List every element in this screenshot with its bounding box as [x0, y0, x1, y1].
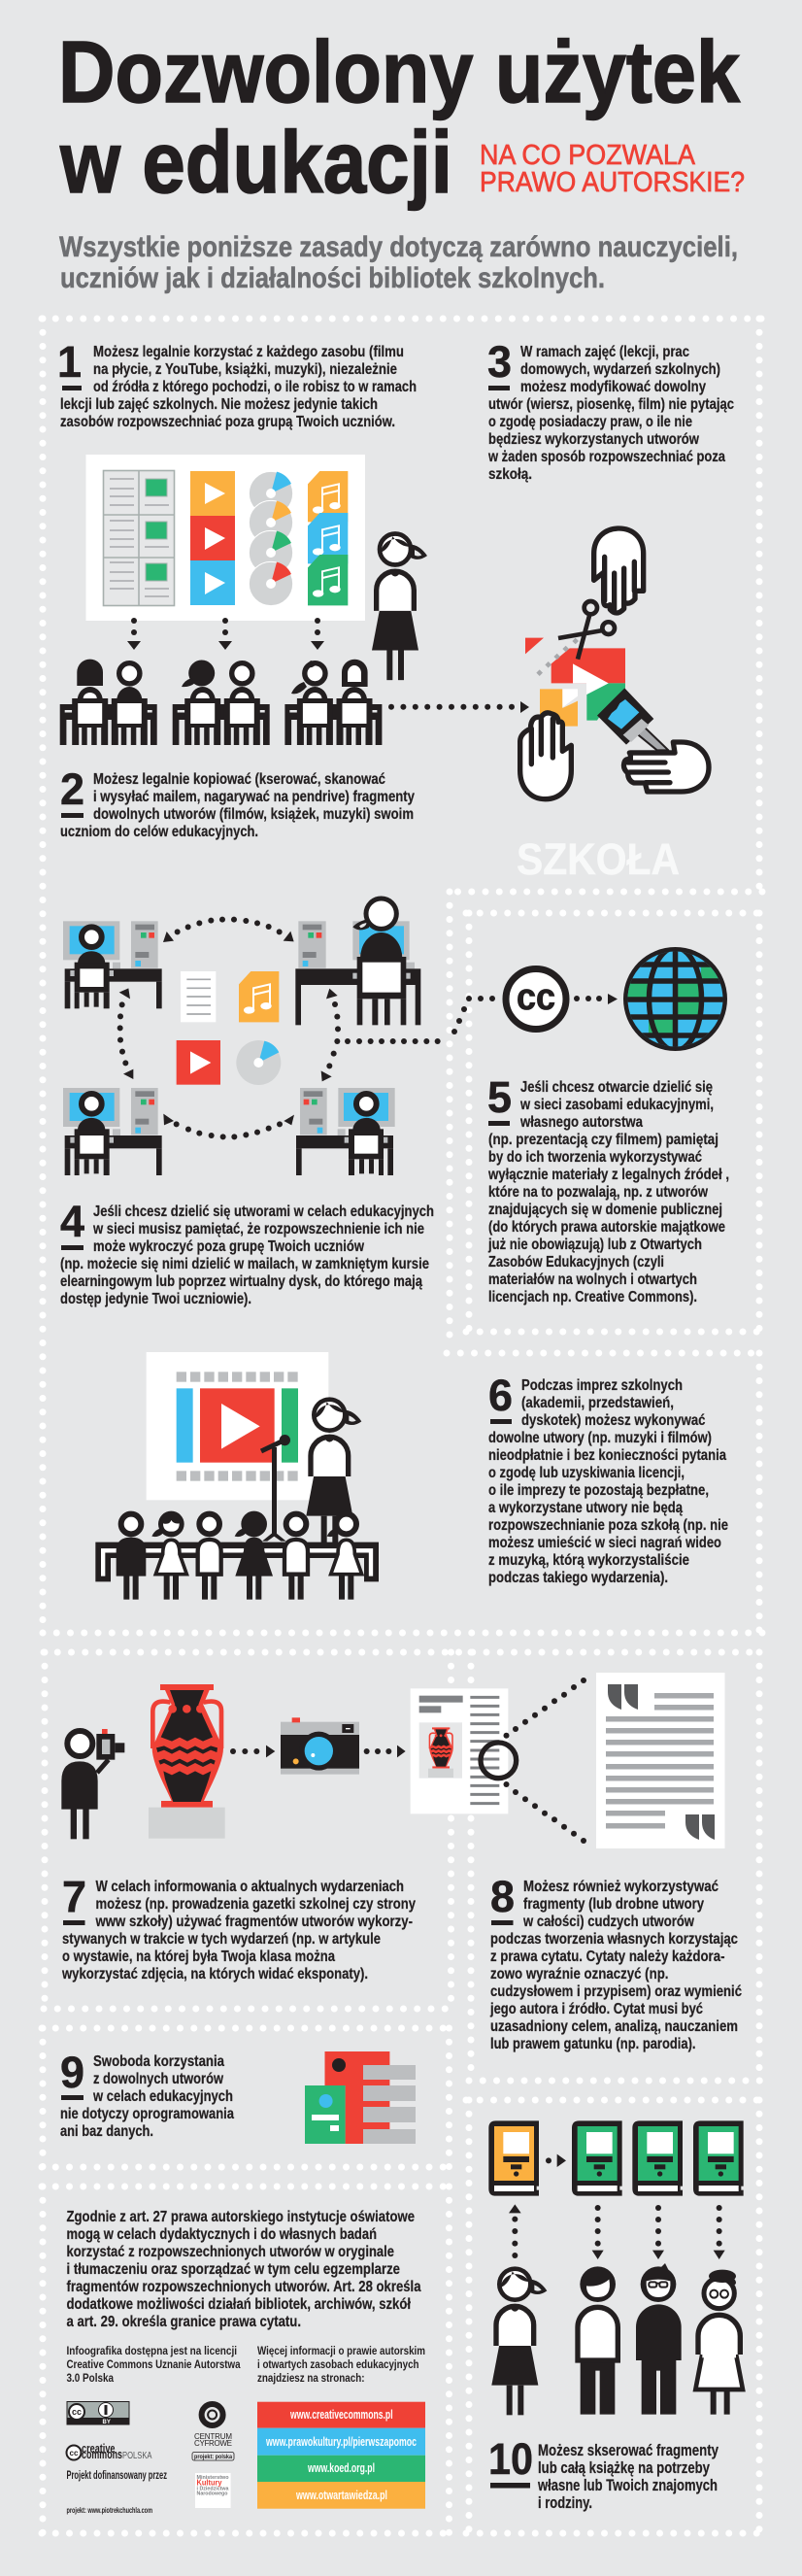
rule 8 text: uzasadniony celem, analizą, nauczaniem [490, 2018, 738, 2035]
rule 5 text: znajdujących się w domenie publicznej [488, 1202, 722, 1218]
rule 7 text: o wystawie, na której była Twoja klasa można [62, 1949, 335, 1965]
legal text: i tłumaczeniu oraz sporządzać w tym celu egzemplarze [66, 2261, 400, 2278]
rule 9 text: Swoboda korzystania [93, 2053, 224, 2070]
legal text: fragmentów rozpowszechnionych utworów. Art. 28 określa [66, 2279, 421, 2295]
rule 5 text: które na to pozwalają, np. z utworów [488, 1184, 709, 1201]
camera [281, 1717, 359, 1775]
scene: photographer, vase, camera, article [61, 1684, 517, 1839]
rule 4 text: Jeśli chcesz dzielić się utworami w celach edukacyjnych [93, 1203, 434, 1220]
person: woman with bun [695, 2270, 743, 2415]
rule 8 text: cudzysłowem i przypisem) oraz wymienić [490, 1983, 742, 2000]
kids [117, 1511, 362, 1600]
arrow [230, 1746, 275, 1757]
film tiles [190, 471, 235, 605]
arrow [364, 1746, 406, 1757]
link list: www.creativecommons.pl [289, 2407, 393, 2422]
rule 8 text: w całości) cudzych utworów [522, 1914, 695, 1930]
rule 6 text [488, 1371, 728, 1586]
icon: creative commons: cc [517, 977, 555, 1018]
computer user bottom right [296, 1088, 395, 1175]
rule 4 text: (np. możecie się nimi dzielić w mailach, w zamkniętym kursie [60, 1256, 429, 1272]
microphone [261, 1435, 290, 1542]
rule 1 text: Możesz legalnie korzystać z każdego zasobu (filmu [93, 344, 404, 360]
photographer [61, 1729, 124, 1839]
subtitle red [480, 140, 745, 198]
teacher [372, 534, 427, 680]
rule 4 text: może wykroczyć poza grupę Twoich uczniów [93, 1238, 365, 1255]
rule 6 text: o ile imprezy te pozostają bezpłatne, [488, 1482, 709, 1499]
cc by badge [67, 2401, 129, 2425]
books [488, 2120, 744, 2196]
title: Dozwolony użytek [58, 24, 741, 121]
title: w edukacji [59, 115, 452, 212]
rule 3 text: szkołą. [488, 466, 532, 483]
quote page [596, 1673, 724, 1848]
license note [66, 2344, 241, 2385]
link list: www.prawokultury.pl/pierwszapomoc [265, 2434, 417, 2449]
article page [411, 1688, 508, 1813]
book pages [103, 470, 175, 606]
centrum cyfrowe logo [192, 2404, 234, 2460]
more info note [257, 2344, 425, 2385]
rule 3 text: będziesz wykorzystanych utworów [488, 431, 700, 448]
rule 3 text: utwór (wiersz, piosenkę, film) nie pytając [488, 396, 734, 413]
link list: www.koed.org.pl [307, 2460, 375, 2475]
ministry logo: Kultury [196, 2479, 222, 2487]
link list: www.otwartawiedza.pl [295, 2488, 387, 2502]
ministry logo: Ministerstwo [196, 2475, 229, 2481]
rule 8 text: lub prawem gatunku (np. parodia). [490, 2036, 695, 2052]
rule 5 text: (do których prawa autorskie majątkowe [488, 1219, 725, 1236]
designer credit: projekt: www.piotrekchuchla.com [66, 2506, 152, 2515]
rule 6 text: (akademii, przedstawień, [521, 1395, 674, 1411]
rule 1 text: 1 [57, 337, 82, 387]
rule 2 text: i wysyłać mailem, nagarywać na pendrive) fragmenty [93, 789, 415, 805]
table [95, 1542, 379, 1581]
rule 8 text [489, 1872, 742, 2052]
video file [177, 1040, 220, 1085]
music file [239, 971, 279, 1022]
brush [597, 688, 668, 750]
rule 6 text: nieodpłatnie i bez konieczności pytania [488, 1447, 726, 1464]
intro heading: uczniów jak i działalności bibliotek szkolnych. [60, 262, 605, 294]
rule 3 text: możesz modyfikować dowolny [520, 379, 706, 395]
rule 4 text: elearningowym lub poprzez wirtualny dysk, do którego mają [60, 1273, 422, 1290]
rule 8 text: zowo wyraźnie oznaczyć (np. [490, 1966, 668, 1983]
ministry logo: i Dziedzictwa [196, 2487, 229, 2492]
license note: 3.0 Polska [66, 2371, 114, 2385]
rule 1 text: zasobów rozpowszechniać poza grupą Twoich uczniów. [60, 414, 395, 430]
rule 5 text: Jeśli chcesz otwarcie dzielić się [520, 1079, 713, 1096]
rule 8 text: fragmenty (lub drobne utwory [523, 1896, 704, 1913]
creative commons polska logo [66, 2441, 152, 2461]
legal text: Zgodnie z art. 27 prawa autorskiego instytucje oświatowe [66, 2209, 415, 2225]
icon: globe [621, 947, 730, 1052]
rule 9 text [60, 2048, 234, 2140]
rule 10 text: Możesz skserować fragmenty [538, 2442, 719, 2459]
rule 6 text: o zgodę lub uzyskiwania licencji, [488, 1465, 685, 1481]
rule 7 text [61, 1872, 416, 1983]
students [60, 660, 382, 745]
centrum cyfrowe logo: projekt: polska [194, 2455, 233, 2460]
rule 1 text [57, 337, 417, 430]
rule 6 text: podczas takiego wydarzenia). [488, 1570, 668, 1586]
rule 6 text: możesz umieścić w sieci nagrań wideo [488, 1535, 721, 1551]
screen [147, 1352, 328, 1500]
ministry logo: Narodowego [196, 2491, 227, 2496]
rule 2 text: dowolnych utworów (filmów, książek, muzyki) swoim [93, 806, 414, 823]
legal text: mogą w celach dydaktycznych i do własnych badań [66, 2226, 377, 2243]
license note: Infoografika dostępna jest na licencji [66, 2344, 237, 2357]
sponsor note: Projekt dofinansowany przez [66, 2468, 167, 2482]
arrows down [127, 618, 324, 650]
discs [249, 471, 293, 606]
top hand [594, 528, 644, 613]
rule 1 text: lekcji lub zajęć szkolnych. Nie możesz jedynie takich [60, 396, 378, 413]
rule 4 text: 4 [60, 1197, 84, 1246]
cc by badge: BY [103, 2420, 111, 2425]
rule 10 text: 10 [488, 2434, 533, 2484]
more info note: i otwartych zasobach edukacyjnych [257, 2357, 419, 2371]
rule 5 text [487, 1072, 729, 1305]
arrows [509, 2154, 725, 2259]
person: girl [491, 2269, 547, 2415]
rule 3 text: 3 [487, 337, 512, 387]
creative commons polska logo: commons [82, 2447, 122, 2461]
rule 10 text [488, 2434, 719, 2512]
rule 5 text: własnego autorstwa [519, 1114, 643, 1131]
person: boy with glasses [636, 2263, 682, 2415]
rule 3 text [487, 337, 734, 483]
rule 6 text: rozpowszechnianie poza szkołą (np. nie [488, 1517, 728, 1534]
computer user bottom left [63, 1088, 162, 1175]
cc by badge: cc [72, 2407, 82, 2417]
subtitle red: PRAWO AUTORSKIE? [480, 167, 745, 198]
rule 7 text: stywanych w trakcie w tych wydarzeń (np. w artykule [62, 1931, 381, 1948]
rule 7 text: wykorzystać zdjęcia, na których widać eksponaty). [61, 1966, 368, 1983]
scene: school event [95, 1352, 379, 1600]
rule 1 text: od źródła z którego pochodzi, o ile robisz to w ramach [93, 379, 417, 395]
rule 7 text: 7 [62, 1872, 86, 1921]
rule 5 text: by do ich tworzenia wykorzystywać [488, 1149, 702, 1166]
zoom lines to quote [503, 1678, 586, 1844]
rule 3 text: o zgodę posiadaczy praw, o ile nie [488, 414, 692, 430]
legal text [66, 2209, 421, 2330]
more info note: Więcej informacji o prawie autorskim [257, 2344, 425, 2357]
rule 10 text: i rodziny. [538, 2494, 592, 2512]
music tiles [308, 471, 348, 605]
rule 6 text: Podczas imprez szkolnych [521, 1377, 683, 1394]
rule 4 text [60, 1197, 434, 1307]
rule 7 text: W celach informowania o aktualnych wydarzeniach [95, 1879, 404, 1895]
computer user top left [63, 921, 162, 1008]
rule 2 text: uczniom do celów edukacyjnych. [60, 824, 258, 840]
rule 2 text: Możesz legalnie kopiować (kserować, skanować [93, 771, 385, 788]
creative commons polska logo: POLSKA [122, 2451, 152, 2461]
rule 9 text: z dowolnych utworów [93, 2071, 224, 2087]
rule 3 text: W ramach zajęć (lekcji, prac [520, 344, 689, 360]
rule 6 text: dowolne utwory (np. muzyki i filmów) [488, 1430, 712, 1446]
vase on pedestal [149, 1684, 225, 1839]
creative commons polska logo: creative [82, 2441, 115, 2456]
rule 8 text: jego autora i źródło. Cytat musi być [489, 2001, 703, 2017]
subtitle red: NA CO POZWALA [480, 140, 696, 171]
icon: remix hands, scissors and brush [520, 528, 709, 799]
rule 4 text: dostęp jedynie Twoi uczniowie). [60, 1291, 251, 1307]
rule 9 text: nie dotyczy oprogramowania [60, 2106, 234, 2122]
rule 7 text: www szkoły) używać fragmentów utworów wykorzy- [95, 1914, 413, 1930]
rule 10 text: lub całą książkę na potrzeby [538, 2459, 711, 2477]
legal text: korzystać z rozpowszechnionych utworów w oryginale [66, 2244, 394, 2260]
circular arrows [117, 917, 441, 1139]
rule 4 text: w sieci musisz pamiętać, że rozpowszechnienie ich nie [92, 1221, 424, 1237]
intro heading [59, 231, 738, 294]
ministry logo [195, 2473, 231, 2508]
rule 5 text: 5 [487, 1072, 512, 1122]
icon: software and databases [305, 2051, 416, 2144]
rule 7 text: możesz (np. prowadzenia gazetki szkolnej czy strony [95, 1896, 416, 1913]
rule 5 text: w sieci zasobami edukacyjnymi, [519, 1097, 714, 1113]
rule 1 text: na płycie, z YouTube, książki, muzyki), niezależnie [93, 361, 397, 378]
rule 9 text: 9 [60, 2048, 84, 2097]
centrum cyfrowe logo: CENTRUM [194, 2432, 232, 2441]
teacher on stage [306, 1400, 361, 1545]
rule 5 text: materiałów na wolnych i otwartych [488, 1271, 697, 1288]
icon: creative commons [506, 969, 566, 1030]
scene: books and people [488, 2120, 744, 2415]
person: boy [578, 2266, 618, 2415]
rule 3 text: domowych, wydarzeń szkolnych) [520, 361, 720, 378]
rule 5 text: wyłącznie materiały z legalnych źródeł , [487, 1167, 729, 1183]
arrow to school [388, 701, 529, 713]
rule 8 text: 8 [490, 1872, 515, 1921]
arrow to globe [574, 994, 618, 1004]
centrum cyfrowe logo: CYFROWE [194, 2439, 232, 2448]
arrow to creative commons [451, 996, 495, 1034]
rule 6 text: a wykorzystane utwory nie będą [488, 1500, 683, 1516]
rule 5 text: już nie obowiązują) lub z Otwartych [487, 1237, 702, 1253]
magnifier [481, 1743, 517, 1779]
rule 2 text: 2 [60, 764, 84, 814]
more info note: znajdziesz na stronach: [257, 2371, 365, 2385]
disc [236, 1040, 281, 1085]
rule 5 text: Zasobów Edukacyjnych (czyli [488, 1254, 664, 1271]
rule 8 text: Możesz również wykorzystywać [523, 1879, 718, 1895]
rule 5 text: (np. prezentacją czy filmem) pamiętaj [488, 1132, 718, 1148]
rule 3 text: w żaden sposób rozpowszechniać poza [487, 449, 725, 465]
lower left hand [520, 713, 571, 799]
scissors [558, 601, 615, 660]
link list [257, 2402, 425, 2509]
rule 2 text [60, 764, 415, 840]
creative commons polska logo: cc [70, 2449, 79, 2457]
teacher at computer [295, 898, 420, 1025]
legal text: dodatkowe możliwości działań bibliotek, archiwów, szkół [66, 2296, 411, 2313]
rule 8 text: podczas tworzenia własnych korzystając [490, 1931, 738, 1948]
legal text: a art. 29. określa granice prawa cytatu. [66, 2314, 301, 2330]
rule 6 text: z muzyką, którą wykorzystaliście [488, 1552, 689, 1569]
lower right hand [623, 742, 709, 792]
rule 10 text: własne lub Twoich znajomych [537, 2477, 718, 2494]
panel: educational resources board [85, 455, 365, 621]
document [181, 971, 216, 1022]
license note: Creative Commons Uznanie Autorstwa [66, 2357, 241, 2371]
rule 5 text: licencjach np. Creative Commons). [488, 1289, 697, 1305]
rule 8 text: z prawa cytatu. Cytaty należy każdora- [490, 1949, 724, 1965]
rule 9 text: w celach edukacyjnych [92, 2088, 233, 2105]
school label: SZKOŁA [517, 834, 680, 884]
rule 6 text: 6 [488, 1371, 513, 1420]
rule 6 text: dyskotek) możesz wykonywać [521, 1412, 706, 1429]
rule 9 text: ani baz danych. [60, 2123, 153, 2140]
title [58, 24, 741, 212]
diagram: sharing network [63, 898, 441, 1175]
